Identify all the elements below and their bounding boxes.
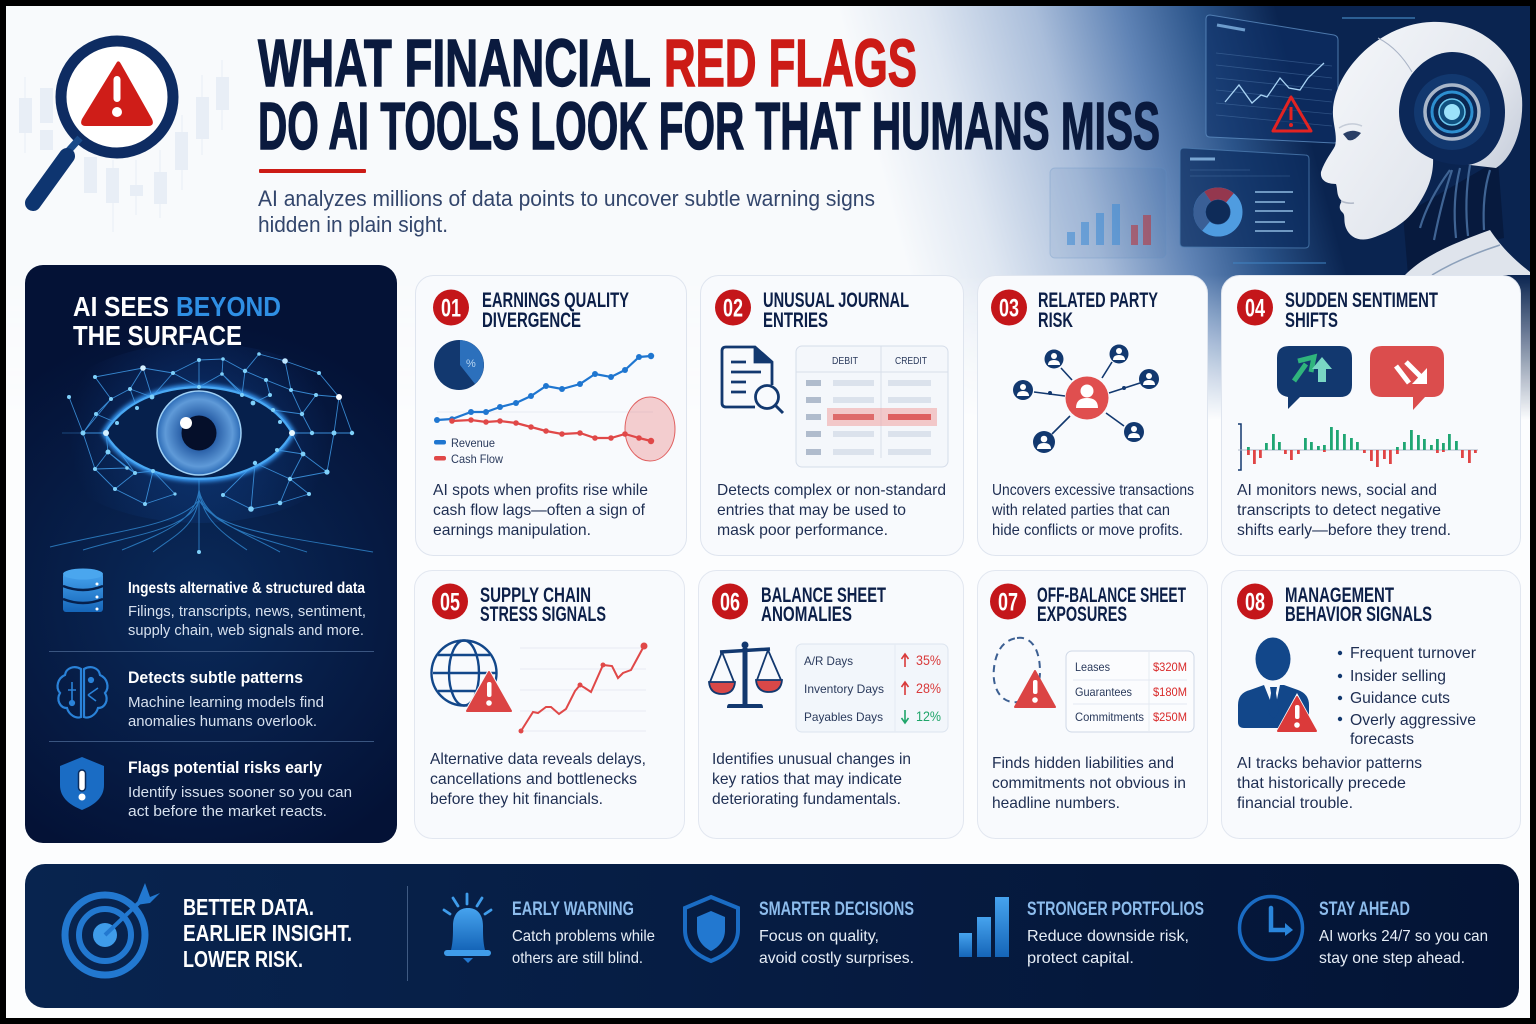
body text 04: AI monitors news, social and [1237, 482, 1437, 499]
table: debit credit: CREDIT [895, 356, 927, 367]
footer item: early warning: EARLY WARNING [512, 899, 634, 920]
table: ratio changes: 35% [916, 652, 941, 668]
icon: positive sentiment bubble [1277, 346, 1352, 409]
card 04: sudden sentiment shifts [1222, 276, 1520, 556]
footer item: early warning: Catch problems while [512, 928, 655, 945]
body text 04: transcripts to detect negative [1237, 502, 1441, 519]
heading 02: UNUSUAL JOURNAL [763, 289, 909, 312]
heading 01: DIVERGENCE [482, 309, 581, 332]
footer item: smarter decisions: avoid costly surprises. [759, 950, 914, 967]
line chart: revenue vs cash flow: Revenue [451, 436, 495, 450]
badge 02 [715, 290, 751, 326]
footer item: early warning [512, 899, 655, 967]
body text 01: AI spots when profits rise while [433, 482, 648, 499]
heading 04: SUDDEN SENTIMENT [1285, 289, 1438, 312]
footer item: stronger portfolios: STRONGER PORTFOLIOS [1027, 899, 1204, 920]
heading 03 [1038, 289, 1158, 332]
footer item: smarter decisions [759, 899, 914, 967]
footer item: stay ahead: STAY AHEAD [1319, 899, 1410, 920]
badge 04 [1237, 290, 1273, 326]
footer item: stay ahead: AI works 24/7 so you can [1319, 928, 1488, 945]
table: ratio changes: 12% [916, 708, 941, 724]
body text 03: Uncovers excessive transactions [992, 482, 1194, 499]
text: detects patterns: anomalies humans overlook. [128, 713, 317, 730]
footer headline: EARLIER INSIGHT. [183, 920, 352, 946]
heading [73, 291, 281, 351]
text: ingests data: Ingests alternative & structured data [128, 580, 365, 597]
body text 01: cash flow lags—often a sign of [433, 502, 646, 519]
card 01: earnings quality divergence [416, 276, 686, 556]
footer item: stronger portfolios [1027, 899, 1204, 967]
badge 06 [712, 584, 748, 620]
title: WHAT FINANCIAL [258, 26, 651, 101]
badge 01 [433, 290, 469, 326]
icon: negative sentiment bubble [1370, 346, 1444, 410]
badge 05: 05 [440, 588, 460, 616]
body text 06 [712, 751, 911, 808]
table: off-balance amounts: Commitments [1075, 710, 1144, 724]
body text 01: earnings manipulation. [433, 522, 591, 539]
body text 08: that historically precede [1237, 775, 1406, 792]
text: flags risks [128, 758, 352, 820]
pie icon [434, 340, 484, 390]
footer banner [25, 864, 1519, 1008]
badge 07 [990, 584, 1026, 620]
icon: scales [709, 642, 782, 708]
bullet list: forecasts [1350, 731, 1414, 748]
text: ingests data [128, 580, 366, 639]
table: ratio changes: A/R Days [804, 654, 853, 668]
icon: clock [1240, 896, 1302, 960]
body text 04 [1237, 482, 1451, 539]
card 06: balance sheet anomalies [698, 570, 964, 838]
icon: target with arrow [65, 883, 160, 975]
heading 04: SHIFTS [1285, 309, 1338, 332]
body text 04: shifts early—before they trend. [1237, 522, 1451, 539]
heading 06: ANOMALIES [761, 603, 852, 626]
illustration: neural network eye [39, 343, 373, 554]
subtitle: AI analyzes millions of data points to uncover subtle warning signs [258, 186, 875, 211]
text: detects patterns: Machine learning models find [128, 694, 324, 711]
body text 03: hide conflicts or move profits. [992, 522, 1183, 539]
text: flags risks: Identify issues sooner so you can [128, 784, 352, 801]
table: off-balance amounts: $320M [1153, 660, 1187, 674]
table: off-balance amounts: $180M [1153, 685, 1187, 699]
title: RED FLAGS [664, 26, 917, 101]
badge 04: 04 [1245, 294, 1265, 322]
panel: AI sees beyond the surface [25, 265, 397, 843]
footer item: smarter decisions: SMARTER DECISIONS [759, 899, 914, 920]
body text 06: deteriorating fundamentals. [712, 791, 901, 808]
heading 08: MANAGEMENT [1285, 584, 1394, 607]
badge 08 [1237, 584, 1273, 620]
body text 02: mask poor performance. [717, 522, 888, 539]
table: off-balance amounts: Leases [1075, 660, 1110, 674]
subtitle: hidden in plain sight. [258, 212, 448, 237]
table: ratio changes: 28% [916, 680, 941, 696]
footer headline: BETTER DATA. [183, 894, 314, 920]
text: ingests data: supply chain, web signals and more. [128, 622, 364, 639]
footer headline: LOWER RISK. [183, 946, 303, 972]
heading 05: STRESS SIGNALS [480, 603, 606, 626]
card 03: related party risk [978, 276, 1208, 556]
card 02: unusual journal entries [700, 276, 964, 556]
body text 03 [991, 482, 1194, 539]
icon: bell [444, 894, 491, 963]
table: off-balance amounts [1066, 651, 1194, 732]
badge 07: 07 [998, 588, 1018, 616]
heading 02: ENTRIES [763, 309, 828, 332]
badge 06: 06 [720, 588, 740, 616]
table: ratio changes [796, 644, 948, 732]
text: detects patterns [128, 668, 324, 730]
body text 02 [717, 482, 946, 539]
text: detects patterns: Detects subtle patterns [128, 668, 303, 687]
line chart: revenue vs cash flow: Cash Flow [451, 452, 503, 466]
footer item: stay ahead: stay one step ahead. [1319, 950, 1465, 967]
heading 05 [480, 584, 606, 626]
icon: magnifier with warning triangle [33, 41, 173, 203]
heading: THE SURFACE [73, 320, 242, 351]
bullet list: Frequent turnover [1350, 645, 1477, 662]
body text 05: Alternative data reveals delays, [430, 751, 646, 768]
heading 03: RELATED PARTY [1038, 289, 1158, 312]
heading 06: BALANCE SHEET [761, 584, 886, 607]
panel: floating bar chart [1050, 168, 1166, 258]
bullet list: Overly aggressive [1350, 712, 1476, 729]
heading 02 [763, 289, 909, 332]
badge 05 [432, 584, 468, 620]
robot head illustration [1321, 22, 1530, 275]
table: off-balance amounts: Guarantees [1075, 685, 1132, 699]
header background gradient [851, 6, 1530, 416]
footer item: stronger portfolios: protect capital. [1027, 950, 1134, 967]
line chart: revenue vs cash flow [434, 353, 675, 466]
icon: globe with warning [432, 640, 515, 714]
dashboard panels behind robot [1050, 15, 1415, 263]
heading 01: EARNINGS QUALITY [482, 289, 629, 312]
body text 03: with related parties that can [991, 502, 1170, 519]
bullet list [1338, 645, 1477, 748]
icon: hidden exposure warning [994, 638, 1055, 707]
body text 05: before they hit financials. [430, 791, 603, 808]
heading 03: RISK [1038, 309, 1073, 332]
badge 01: 01 [441, 294, 461, 322]
text: flags risks: act before the market reacts. [128, 803, 327, 820]
heading 04 [1285, 289, 1438, 332]
icon: executive with warning [1238, 638, 1319, 733]
body text 02: Detects complex or non-standard [717, 482, 946, 499]
panel: floating donut chart [1180, 148, 1309, 248]
card 07: off-balance sheet exposures [978, 570, 1208, 838]
icon: candlestick backdrop [19, 60, 229, 232]
heading 07: EXPOSURES [1037, 603, 1127, 626]
bullet list: Insider selling [1350, 668, 1446, 685]
body text 02: entries that may be used to [717, 502, 906, 519]
heading: BEYOND [176, 291, 281, 322]
body text 08: financial trouble. [1237, 795, 1353, 812]
body text 05: cancellations and bottlenecks [430, 771, 637, 788]
body text 07: headline numbers. [992, 795, 1120, 812]
subtitle [258, 186, 875, 237]
title [258, 26, 1160, 164]
footer item: early warning: others are still blind. [512, 950, 643, 967]
body text 01 [433, 482, 648, 539]
pie icon: % [466, 358, 476, 370]
body text 07 [992, 755, 1186, 812]
badge 03 [991, 290, 1027, 326]
icon: shield alert [60, 757, 104, 810]
heading 08 [1285, 584, 1432, 626]
table: off-balance amounts: $250M [1153, 710, 1187, 724]
footer item: stronger portfolios: Reduce downside risk, [1027, 928, 1189, 945]
card 08: management behavior signals [1222, 570, 1520, 838]
body text 05 [430, 751, 646, 808]
badge 02: 02 [723, 294, 743, 322]
heading 06 [761, 584, 886, 626]
footer item: smarter decisions: Focus on quality, [759, 928, 879, 945]
icon: database [63, 568, 103, 612]
icon: rising bars [959, 897, 1009, 957]
body text 08: AI tracks behavior patterns [1237, 755, 1422, 772]
network diagram [1013, 344, 1159, 453]
badge 08: 08 [1245, 588, 1265, 616]
card 05: supply chain stress signals [414, 570, 684, 838]
heading 08: BEHAVIOR SIGNALS [1285, 603, 1432, 626]
text: ingests data: Filings, transcripts, news, sentiment, [128, 603, 366, 620]
footer item: stay ahead [1319, 899, 1488, 967]
text: flags risks: Flags potential risks early [128, 758, 323, 777]
table: ratio changes: Inventory Days [804, 682, 884, 696]
heading 05: SUPPLY CHAIN [480, 584, 591, 607]
table: debit credit: DEBIT [832, 356, 858, 367]
icon: shield [685, 897, 738, 961]
body text 06: key ratios that may indicate [712, 771, 902, 788]
table: ratio changes: Payables Days [804, 710, 883, 724]
icon: brain [58, 667, 107, 718]
bullet list: Guidance cuts [1350, 690, 1450, 707]
icon: document magnifier [722, 347, 783, 413]
body text 08 [1237, 755, 1422, 812]
badge 03: 03 [999, 294, 1019, 322]
heading 01 [482, 289, 629, 332]
body text 07: Finds hidden liabilities and [992, 755, 1174, 772]
heading: AI SEES [73, 291, 169, 322]
panel: floating line chart with warning [1206, 15, 1338, 143]
heading 07 [1037, 584, 1186, 626]
line chart: supply stress [518, 642, 648, 734]
body text 06: Identifies unusual changes in [712, 751, 911, 768]
footer headline [183, 894, 352, 972]
body text 07: commitments not obvious in [992, 775, 1186, 792]
table: debit credit [796, 346, 948, 467]
sentiment bar chart [1238, 424, 1478, 470]
heading 07: OFF-BALANCE SHEET [1037, 584, 1186, 607]
